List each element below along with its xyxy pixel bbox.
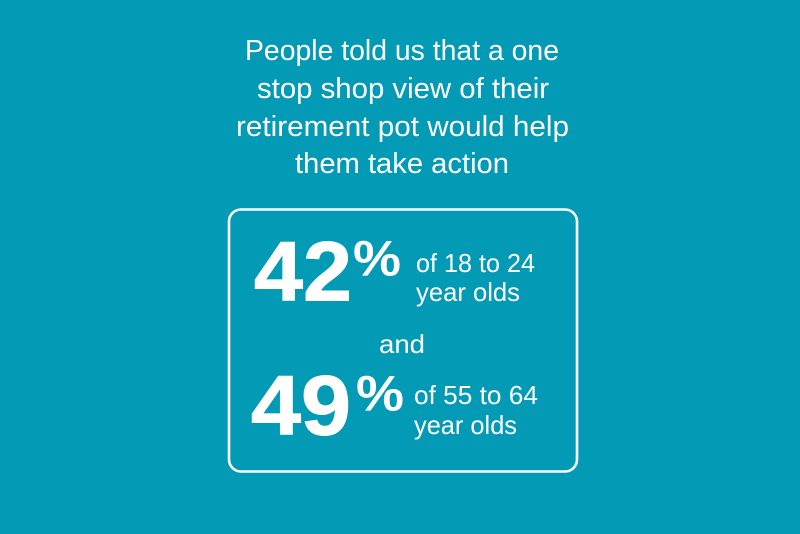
label: of 55 to 64 year olds: of 55 to 64: [414, 380, 538, 410]
label: of 55 to 64 year olds: [414, 380, 538, 440]
label: of 18 to 24 year olds: of 18 to 24: [416, 248, 535, 278]
label: of 18 to 24 year olds: year olds: [416, 277, 520, 307]
number: 42: 42: [254, 224, 352, 318]
stats panel: [229, 210, 577, 472]
percent sign: %: [356, 366, 404, 422]
heading: stop shop view of their: [257, 73, 549, 105]
percent sign: %: [353, 230, 401, 286]
label: of 55 to 64 year olds: year olds: [414, 410, 517, 440]
stat: 49% of 55 to 64 year olds: [251, 358, 538, 452]
connector word: and: and: [379, 329, 425, 359]
heading: [236, 35, 569, 180]
label: of 18 to 24 year olds: [416, 248, 535, 307]
panel outline: [229, 210, 577, 472]
stat: 42% of 18 to 24 year olds: [254, 224, 535, 318]
heading: People told us that a one: [245, 35, 559, 67]
heading: them take action: [295, 148, 509, 180]
number: 49: 49: [251, 358, 351, 452]
heading: retirement pot would help: [236, 111, 569, 143]
